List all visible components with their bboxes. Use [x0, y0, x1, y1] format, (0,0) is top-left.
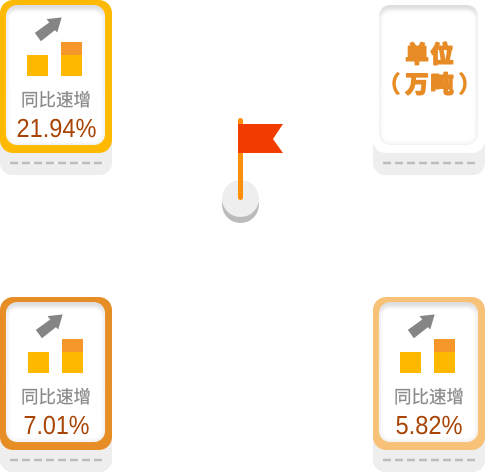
inner panel [6, 5, 105, 145]
card frame [0, 0, 112, 153]
icon: bars [28, 339, 83, 373]
label: 同比速增 [394, 387, 464, 407]
icon: growth arrow [408, 315, 434, 338]
panel: card 5.82% [373, 297, 485, 472]
card frame [0, 297, 112, 450]
icon: bars [27, 42, 82, 76]
card base [373, 437, 485, 472]
inner panel [379, 302, 478, 442]
card frame [373, 297, 485, 450]
unit text: ） [458, 71, 482, 97]
panel: unit card [373, 0, 485, 175]
label: 同比速增 [21, 387, 91, 407]
panel: card 7.01% [0, 297, 112, 472]
unit text: 位 [430, 41, 454, 67]
unit text [378, 41, 482, 97]
icon: growth arrow [36, 18, 61, 40]
unit text: 万 [406, 71, 428, 97]
inner panel [379, 5, 478, 145]
unit text: 单 [406, 41, 428, 67]
unit text: 吨 [430, 71, 454, 97]
card base [0, 140, 112, 175]
dashed line [10, 459, 103, 461]
dashed line [383, 459, 476, 461]
value: 7.01% [24, 410, 90, 440]
card base [373, 140, 485, 175]
unit text: （ [378, 71, 400, 97]
card frame [373, 0, 485, 153]
flag base top [222, 180, 259, 217]
icon: growth arrow [36, 315, 62, 338]
card base [0, 437, 112, 472]
value: 21.94% [16, 113, 96, 143]
flag cloth [238, 124, 283, 153]
label: 同比速增 [21, 90, 91, 110]
inner panel [6, 302, 105, 442]
icon: flag on base [222, 118, 283, 223]
dashed line [383, 162, 476, 164]
icon: bars [400, 339, 455, 373]
dashed line [10, 162, 103, 164]
value: 5.82% [396, 410, 462, 440]
flag pole [238, 118, 243, 200]
panel: card 21.94% [0, 0, 112, 175]
flag base shadow [222, 186, 259, 223]
